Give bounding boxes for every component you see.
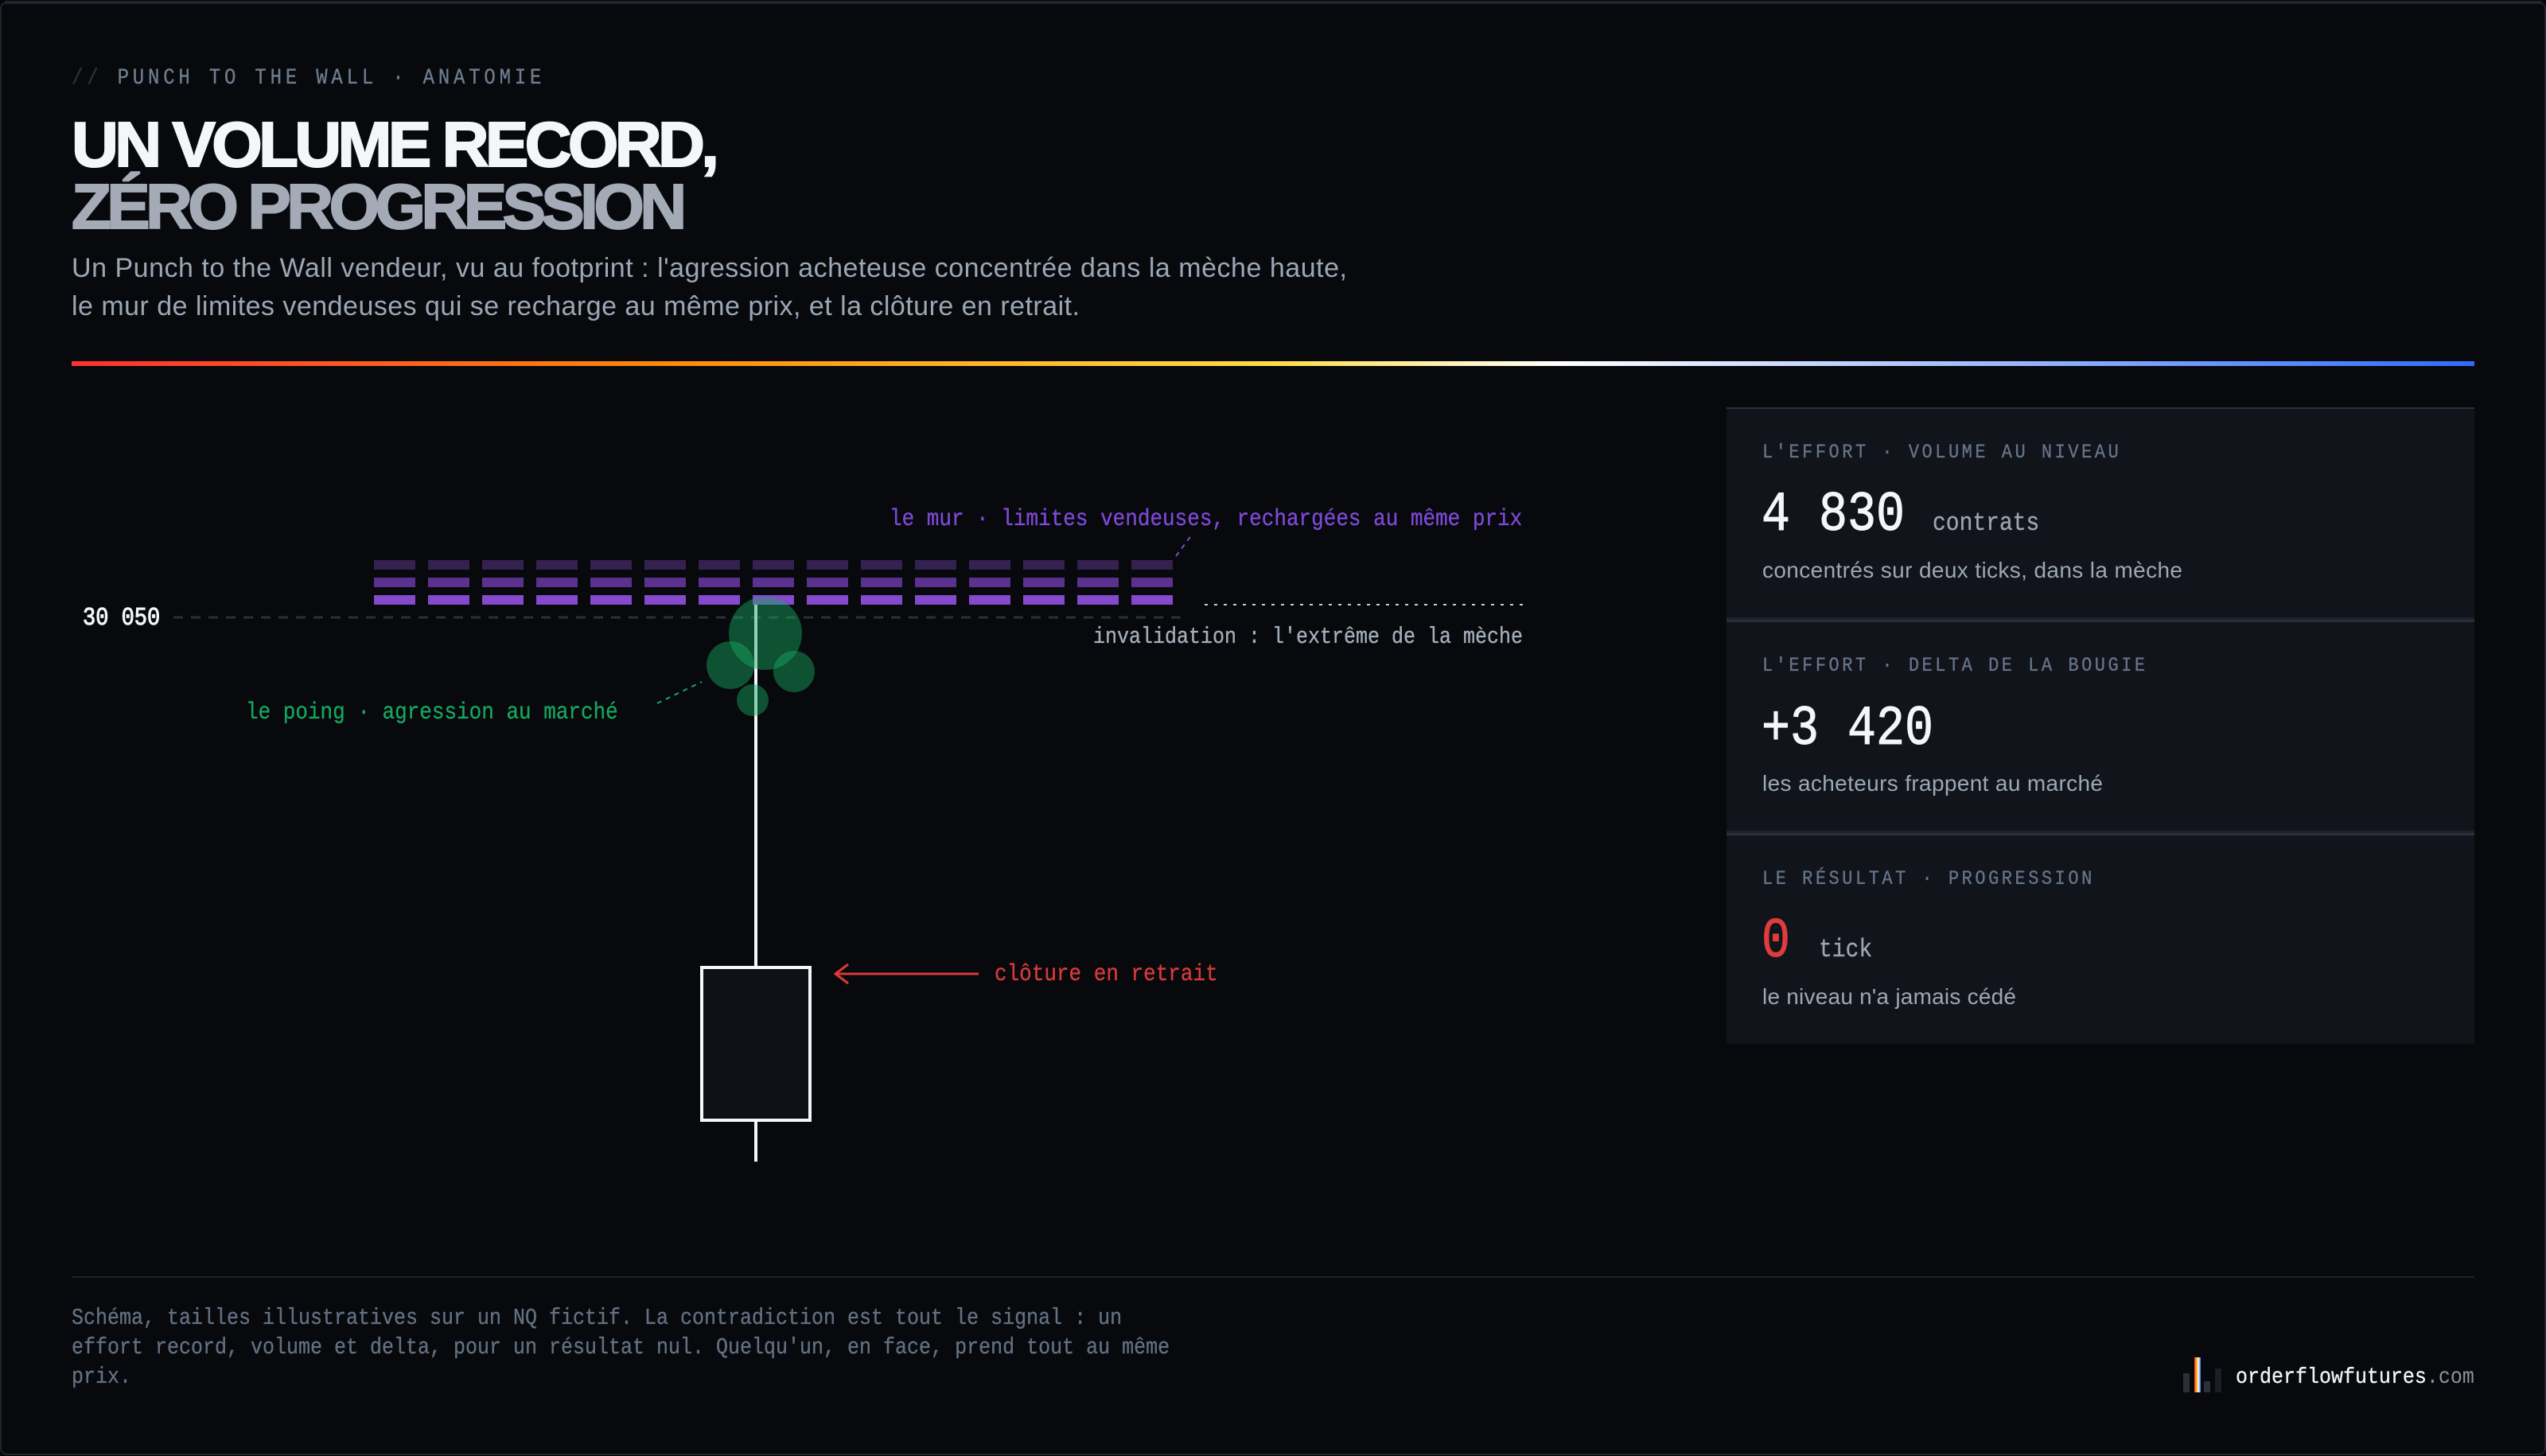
brand name: orderflowfutures.com xyxy=(2236,1365,2474,1389)
card: result: LE RÉSULTAT · PROGRESSION xyxy=(1762,867,2095,891)
title: UN VOLUME RECORD, xyxy=(72,110,719,181)
panel background xyxy=(1727,407,2474,1044)
invalidation label: invalidation : l'extrême de la mèche xyxy=(1093,625,1523,651)
card separators xyxy=(1727,407,2474,835)
card: volume: concentrés sur deux ticks, dans la mèche xyxy=(1762,558,2182,582)
card: volume xyxy=(1762,442,2182,582)
card: volume: L'EFFORT · VOLUME AU NIVEAU xyxy=(1762,442,2121,465)
price label: 30 050 xyxy=(83,604,160,633)
wall leader xyxy=(1176,535,1192,556)
card: result xyxy=(1762,867,2095,1009)
wall label: le mur · limites vendeuses, rechargées au même prix xyxy=(890,507,1522,533)
card: delta: L'EFFORT · DELTA DE LA BOUGIE xyxy=(1762,655,2148,678)
card: result: 0 xyxy=(1762,909,1790,974)
fist leader xyxy=(657,682,702,703)
fist: market aggression bubbles xyxy=(707,597,815,716)
invalidation dotted line xyxy=(1205,604,1524,605)
close label: clôture en retrait xyxy=(995,962,1218,988)
card: result: tick xyxy=(1819,936,1872,965)
footnote: effort record, volume et delta, pour un résultat nul. Quelqu'un, en face, prend tout au même xyxy=(72,1336,1170,1361)
chart: punch to the wall candle xyxy=(83,507,1524,1162)
card: delta: les acheteurs frappent au marché xyxy=(1762,771,2103,796)
subtitle: Un Punch to the Wall vendeur, vu au footprint : l'agression acheteuse concentrée dans la mèche haute, xyxy=(72,253,1347,283)
logo mark xyxy=(2183,1357,2221,1392)
footnote xyxy=(72,1306,1170,1391)
footnote: Schéma, tailles illustratives sur un NQ fictif. La contradiction est tout le signal : un xyxy=(72,1306,1122,1332)
eyebrow: // PUNCH TO THE WALL · ANATOMIE xyxy=(72,65,545,91)
close arrow xyxy=(835,964,979,983)
candle wick xyxy=(754,605,757,1162)
card: delta xyxy=(1762,655,2148,796)
subtitle: le mur de limites vendeuses qui se recharge au même prix, et la clôture en retrait. xyxy=(72,291,1080,321)
subtitle xyxy=(72,253,1347,321)
card: volume: contrats xyxy=(1933,509,2039,539)
card: delta: +3 420 xyxy=(1762,697,1933,761)
title: ZÉRO PROGRESSION xyxy=(72,171,687,243)
price level line xyxy=(173,616,1182,619)
wall of sell limits xyxy=(374,560,1173,605)
fist label: le poing · agression au marché xyxy=(246,700,618,726)
footnote: prix. xyxy=(72,1365,131,1391)
candle body xyxy=(702,967,810,1120)
card: result: le niveau n'a jamais cédé xyxy=(1762,984,2016,1009)
rainbow rule xyxy=(72,361,2474,366)
card: volume: 4 830 xyxy=(1762,483,1905,547)
title xyxy=(72,110,719,243)
panel: stats xyxy=(1727,407,2474,1044)
footer rule xyxy=(72,1276,2474,1278)
